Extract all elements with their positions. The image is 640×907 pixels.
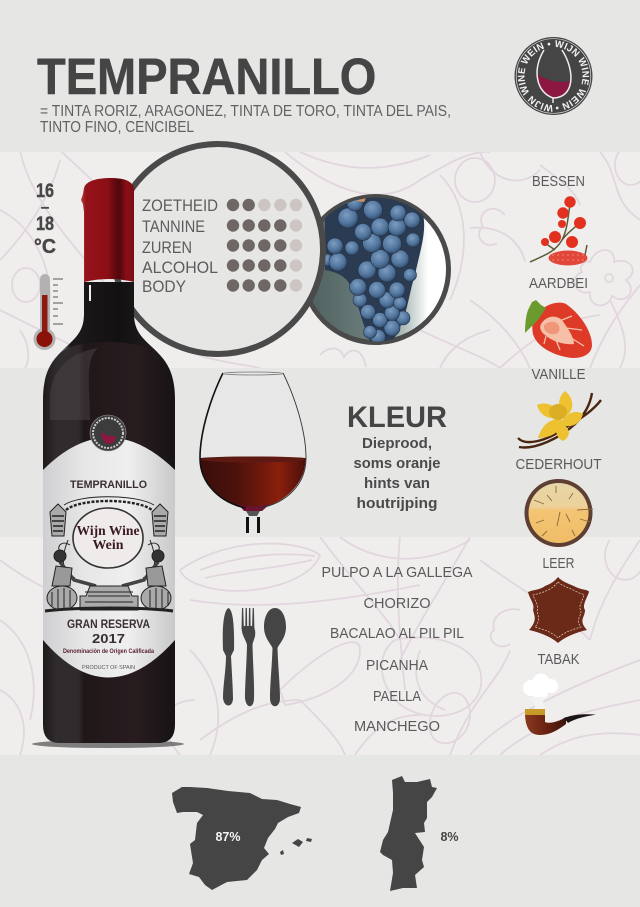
profile labels: BODY [142,277,186,296]
food pairings: PAELLA [373,688,421,705]
colour description [354,435,440,512]
floral patterned bands [0,145,640,755]
food pairings [322,564,472,735]
wine glass [200,372,306,533]
grape cluster [321,194,424,345]
label name: Wein [92,538,124,553]
temperature: – [41,199,49,216]
profile labels: TANNINE [142,217,205,236]
tasting profile circle [113,144,323,354]
colour description: soms oranje [354,455,440,472]
aroma: tabak: TABAK [538,652,580,668]
temperature [34,181,56,258]
bottle shadow [32,740,184,748]
profile labels: ALCOHOL [142,258,218,277]
food pairings: BACALAO AL PIL PIL [330,625,464,642]
title: TEMPRANILLO [37,49,376,105]
label vintage text: GRAN RESERVA [67,619,150,631]
label vintage text: Denominación de Origen Calificada [63,648,154,655]
food pairings: CHORIZO [364,595,430,612]
bottle body [43,282,175,743]
aroma: vanille [518,367,601,447]
icon: cutlery [223,608,286,706]
bottle capsule [81,178,134,282]
label variety: TEMPRANILLO [70,479,147,491]
grape photo circle [302,194,448,345]
spain share: 87% [215,830,241,844]
temperature: 18 [36,214,54,235]
aroma: vanille: VANILLE [532,367,586,383]
map: spain [172,787,312,890]
subtitle: synonyms: = TINTA RORIZ, ARAGONEZ, TINTA DE TORO, TINTA DEL PAIS, [40,103,451,120]
bottle label [43,415,175,678]
aroma: leer [528,556,589,643]
aroma: aardbei [525,276,592,358]
label badge [90,415,126,451]
subtitle: synonyms: TINTO FINO, CENCIBEL [40,119,194,136]
label vintage text [63,619,154,671]
wine [200,456,306,508]
food pairings: PULPO A LA GALLEGA [322,564,472,581]
aroma: bessen: BESSEN [532,174,585,190]
logo badge: WIJN WINE WEIN • WIJN WINE WEIN • [518,40,590,112]
label engraving [45,497,173,611]
label vintage text: 2017 [92,631,125,646]
aroma: leer: LEER [542,556,574,572]
colour description: houtrijping [356,495,438,512]
profile labels [142,196,218,296]
label name [76,524,140,553]
temperature: °C [34,236,56,258]
profile labels: ZOETHEID [142,196,218,215]
aroma: cederhout [516,457,602,547]
colour heading: KLEUR [347,401,447,434]
food pairings: MANCHEGO [354,718,440,735]
colour description: Dieprood, [362,435,432,452]
label cartouche [73,508,143,568]
subtitle: synonyms [40,103,451,136]
icon: thermometer [34,274,63,350]
rating dots [227,199,302,292]
aroma: aardbei: AARDBEI [529,276,588,292]
aroma: cederhout: CEDERHOUT [516,457,602,473]
profile labels: ZUREN [142,238,192,257]
map: portugal [380,776,437,891]
food pairings: PICANHA [366,657,428,674]
aroma: tabak [523,652,596,735]
label name: Wijn Wine [76,524,140,539]
portugal share: 8% [440,830,459,844]
colour description: hints van [364,475,430,492]
aroma: bessen [530,174,588,266]
temperature: 16 [36,181,54,202]
wine bottle [32,178,184,748]
label vintage text: PRODUCT OF SPAIN [82,665,135,671]
